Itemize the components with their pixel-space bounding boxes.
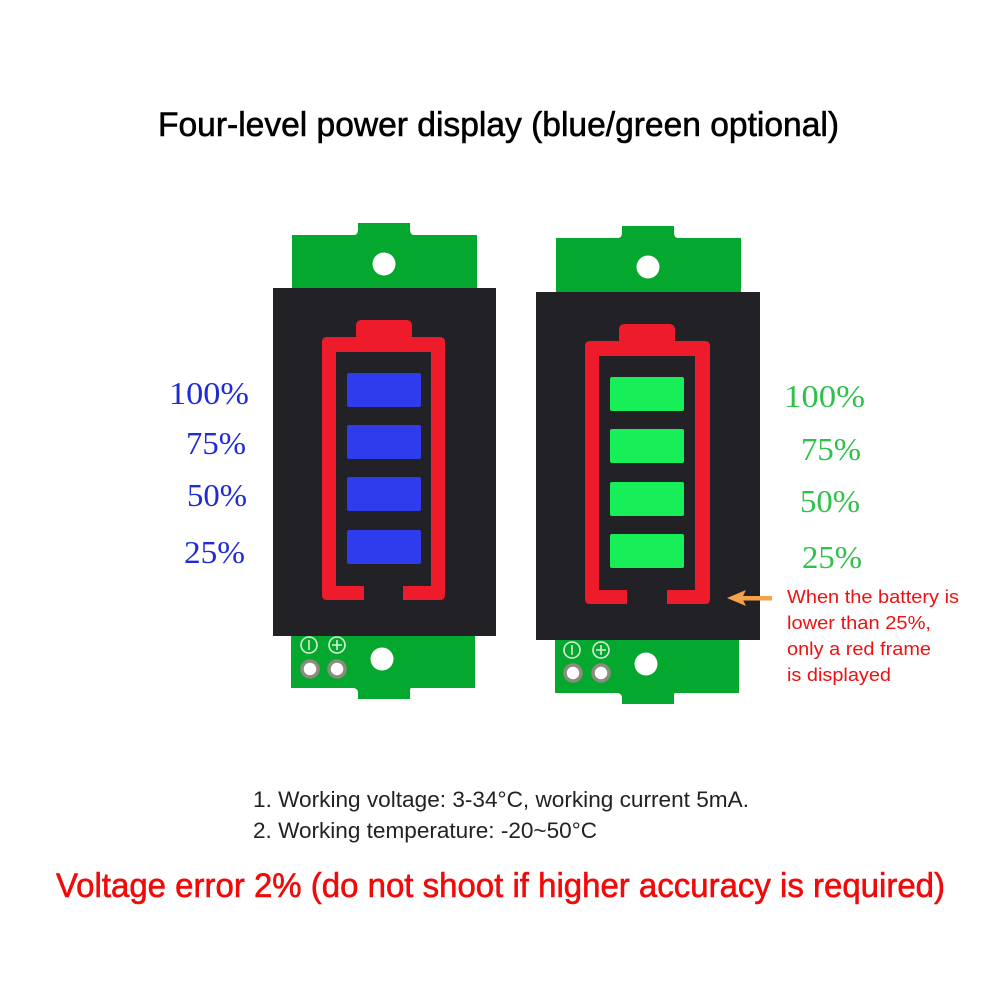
specification text: 1. Working voltage: 3-34°C, working current 5mA. [253,787,749,812]
solder pins [565,665,609,681]
green percentage labels: 50% [800,483,860,519]
circuit board [555,226,741,704]
panel: green battery module [536,226,760,704]
blue percentage labels: 75% [186,425,246,461]
callout: low battery note: only a red frame [787,639,931,659]
specification text: 2. Working temperature: -20~50°C [253,818,597,843]
display body [273,288,496,636]
callout: low battery note [787,587,959,685]
callout: low battery note: When the battery is [787,587,959,607]
panel: blue battery module [273,223,496,699]
solder pins [302,661,345,677]
voltage error warning: Voltage error 2% (do not shoot if higher accuracy is required) [56,867,945,905]
green percentage labels: 75% [801,431,861,467]
green level bars [610,377,684,568]
circuit board [291,223,477,699]
callout: low battery note: is displayed [787,665,891,685]
mounting holes [370,252,396,670]
blue percentage labels: 50% [187,477,247,513]
green percentage labels: 25% [802,539,862,575]
green percentage labels: 100% [784,378,865,414]
mounting holes [634,256,660,676]
callout: low battery note: lower than 25%, [787,613,931,633]
red battery frame [322,320,445,600]
specification text [253,787,749,843]
green percentage labels [784,378,865,575]
title: Four-level power display (blue/green optional) [158,106,839,144]
terminal symbols [301,637,345,653]
blue level bars [347,373,421,564]
red battery frame [585,324,710,604]
blue percentage labels: 25% [184,534,245,570]
terminal symbols [564,642,609,658]
blue percentage labels: 100% [169,375,249,411]
arrow: points to red frame [727,590,772,606]
blue percentage labels [169,375,249,570]
display body [536,292,760,640]
